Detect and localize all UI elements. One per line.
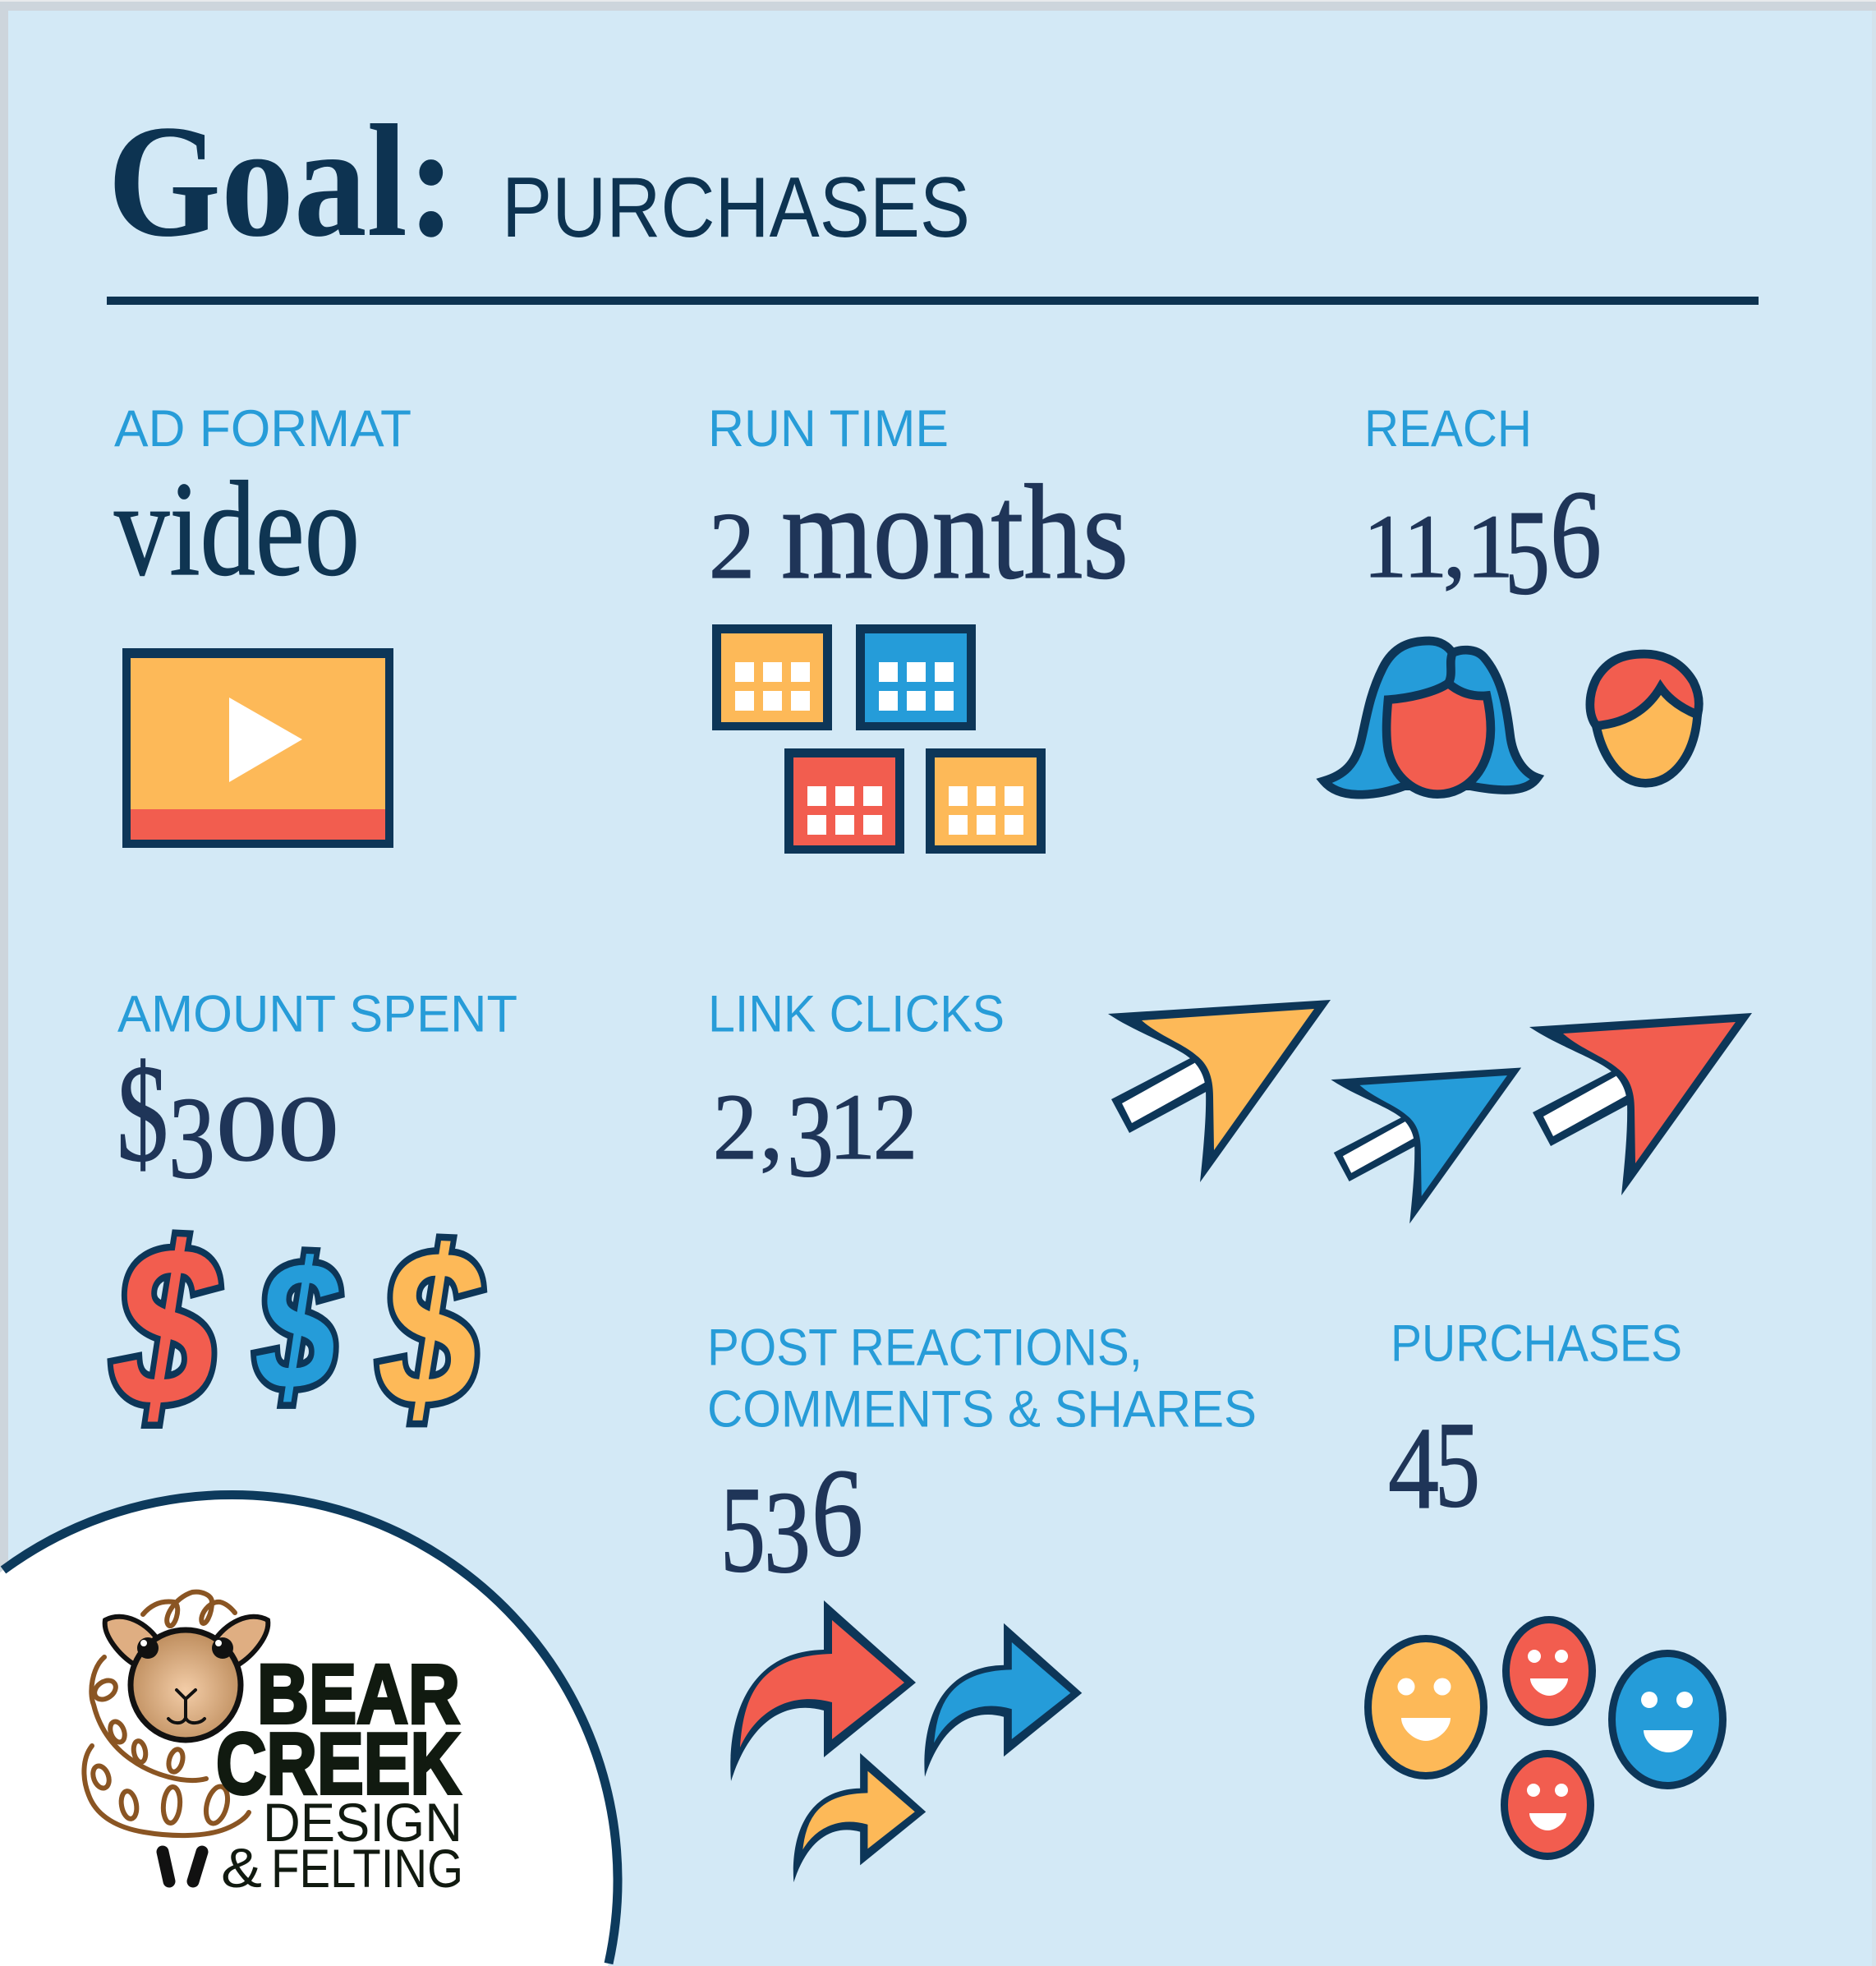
value: 11,156: 5 — [1505, 486, 1550, 620]
value: 2,312: 1 — [829, 1075, 876, 1179]
value: $300: 0 — [216, 1076, 278, 1181]
label: post reactions — [707, 1319, 1257, 1438]
label: post reactions: COMMENTS & SHARES — [707, 1380, 1257, 1438]
value: 11,156: 11 — [1363, 496, 1447, 596]
value: $300: 3 — [168, 1073, 215, 1203]
icon: calendars — [712, 624, 1046, 854]
logo wordmark — [216, 1647, 463, 1899]
title — [108, 92, 970, 270]
value: 2,312: 2 — [713, 1075, 757, 1179]
title: PURCHASES — [502, 160, 970, 256]
logo wordmark: FELTING — [271, 1838, 463, 1899]
icon: video player — [122, 648, 393, 848]
value: 2,312: , — [760, 1075, 784, 1179]
icon: red share arrow — [730, 1600, 916, 1781]
value: 536 — [720, 1443, 863, 1598]
value: 11,156: 6 — [1550, 465, 1602, 605]
logo wordmark: BEAR — [257, 1647, 460, 1741]
value: $300 — [117, 1036, 339, 1203]
panel: reach — [1324, 400, 1699, 794]
value: 2,312: 2 — [873, 1075, 917, 1179]
value: video: video — [114, 454, 360, 604]
logo wordmark: & — [221, 1837, 262, 1899]
icon: sheep curls — [84, 1592, 249, 1835]
value: 45: 4 — [1388, 1403, 1439, 1533]
label: ad format: AD FORMAT — [114, 400, 412, 458]
value: 45 — [1388, 1397, 1480, 1533]
label: post reactions: POST REACTIONS, — [707, 1319, 1143, 1377]
icon: people heads — [1324, 641, 1699, 794]
icon: blue smiley — [1612, 1653, 1723, 1786]
value: $300: $ — [117, 1036, 168, 1190]
icon: yellow smiley — [1368, 1638, 1483, 1776]
panel: run time — [708, 400, 1129, 854]
value: 2 months: months — [781, 457, 1129, 607]
icon: sheep head — [131, 1630, 241, 1740]
icon: sheep eyes — [137, 1637, 233, 1659]
panel: purchases — [1368, 1315, 1723, 1857]
label: amount spent: AMOUNT SPENT — [117, 986, 517, 1043]
logo: Bear Creek Design & Felting — [84, 1592, 463, 1899]
icon: dollar signs — [111, 1200, 484, 1453]
icon: dollar signs: $ — [378, 1204, 484, 1451]
icon: sheep mouth — [168, 1690, 205, 1723]
icon: dollar signs: $ — [255, 1224, 339, 1427]
title: Goal: — [108, 92, 456, 270]
panel: link clicks — [708, 986, 1752, 1223]
value: 536: 5 — [720, 1462, 766, 1598]
logo wordmark: CREEK — [216, 1715, 461, 1812]
value: 536: 3 — [764, 1467, 811, 1597]
icon: woman — [1324, 641, 1538, 794]
icon: blue cursor — [1331, 1068, 1521, 1223]
label: purchases: PURCHASES — [1391, 1315, 1682, 1372]
label: reach: REACH — [1364, 400, 1532, 458]
panel: ad format — [114, 400, 412, 848]
value: 11,156 — [1363, 465, 1602, 620]
panel: logo circle — [0, 1494, 618, 1966]
value: 2,312: 3 — [787, 1071, 834, 1201]
icon: dollar signs: $ — [111, 1200, 221, 1453]
value: 11,156: 1 — [1466, 496, 1514, 596]
icon: blue share arrow — [924, 1623, 1082, 1777]
value: $300: 0 — [278, 1076, 339, 1181]
icon: red smiley bottom — [1505, 1753, 1590, 1857]
icon: sheep ears — [105, 1617, 268, 1665]
value: 11,156: , — [1443, 496, 1465, 596]
panel: post reactions, comments and shares — [707, 1319, 1257, 1882]
icon: red smiley top — [1506, 1620, 1592, 1722]
icon: sheep legs — [163, 1852, 202, 1881]
value: 536: 6 — [812, 1443, 863, 1583]
panel: amount spent — [111, 986, 517, 1453]
icon: yellow cursor — [1108, 1000, 1331, 1182]
logo wordmark: DESIGN — [263, 1792, 462, 1853]
value: 45: 5 — [1435, 1397, 1480, 1533]
icon: yellow share arrow — [793, 1753, 926, 1882]
icon: red cursor — [1529, 1013, 1752, 1195]
value: 2 months: 2 — [709, 494, 755, 598]
value: 2,312 — [713, 1071, 917, 1201]
label: run time: RUN TIME — [708, 400, 949, 458]
label: link clicks: LINK CLICKS — [708, 986, 1005, 1043]
icon: man — [1590, 654, 1699, 783]
